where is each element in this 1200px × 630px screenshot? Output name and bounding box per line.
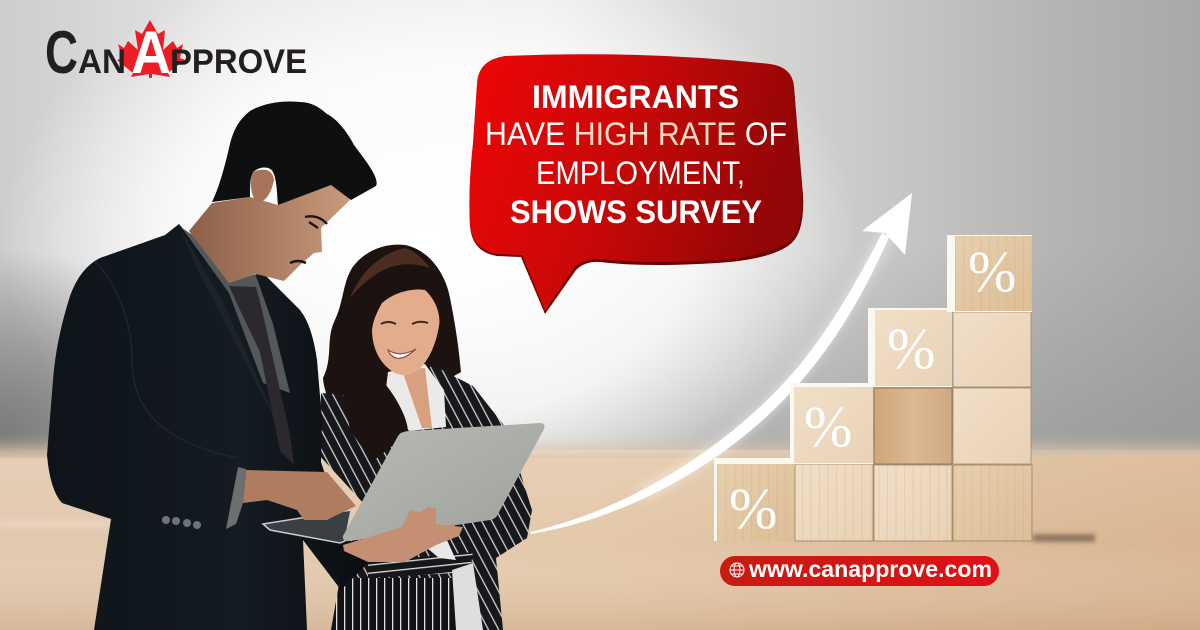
woman face [372,290,439,375]
woman jacket [319,365,532,630]
logo: CanApprove: PPROVE [170,43,307,81]
laptop [263,423,544,543]
wooden percent blocks [714,235,1095,542]
heading line 1: IMMIGRANTS [532,79,739,115]
speech bubble headline [469,54,803,314]
rising arrow [530,193,912,534]
heading line 4: SHOWS SURVEY [510,194,762,230]
logo: CanApprove: C [45,19,78,86]
woman hair back [323,245,461,464]
woman hair front [340,280,408,462]
laptop lid [343,423,544,541]
block grain overlay [795,464,1032,541]
woman waist band [368,552,473,578]
website pill: www.canapprove.com [748,556,992,582]
man suit [47,224,371,630]
block: third column percent: % [887,316,935,381]
block: second column percent: % [804,394,852,459]
man sleeve buttons [162,516,201,529]
man shirt [182,228,290,393]
block: bottom row percent: % [729,476,777,541]
woman features [381,322,428,324]
man hand [243,470,356,520]
logo: CanApprove: AN [78,43,126,81]
woman smile [388,349,416,358]
block shadow on floor [1033,534,1095,542]
man sleeve seam [95,262,238,458]
woman shirt [385,364,446,431]
man tie [229,286,294,465]
block: top percent: % [968,239,1016,304]
man neck and face [189,180,350,283]
woman lower stripes [331,578,456,630]
figure: man in suit [47,101,377,630]
woman neck [402,368,432,428]
logo: CanApprove: A [131,19,171,86]
laptop base [263,510,351,543]
figure: woman with laptop [319,245,532,630]
man cuff [226,467,246,529]
icon: globe [730,563,744,577]
man lapel shadow [180,228,285,440]
block: third column percent [868,308,952,387]
block: bottom row plain [795,464,1032,541]
block: bottom row percent [714,458,795,541]
man hair [212,101,377,205]
man features [290,216,327,263]
block: top percent [947,235,1032,312]
icon: maple leaf [117,20,185,78]
woman shirt lower [452,563,483,630]
block: right column plain [953,312,1031,464]
block: second column percent [790,383,873,464]
man ear [251,170,274,203]
block: dark centre block [874,388,952,464]
heading line 3: EMPLOYMENT, [536,155,745,191]
heading line 2: HAVE HIGH RATE OF [485,116,787,152]
woman cuff [427,538,456,560]
logo: CanApprove [45,19,307,86]
woman hand under laptop [343,507,463,562]
